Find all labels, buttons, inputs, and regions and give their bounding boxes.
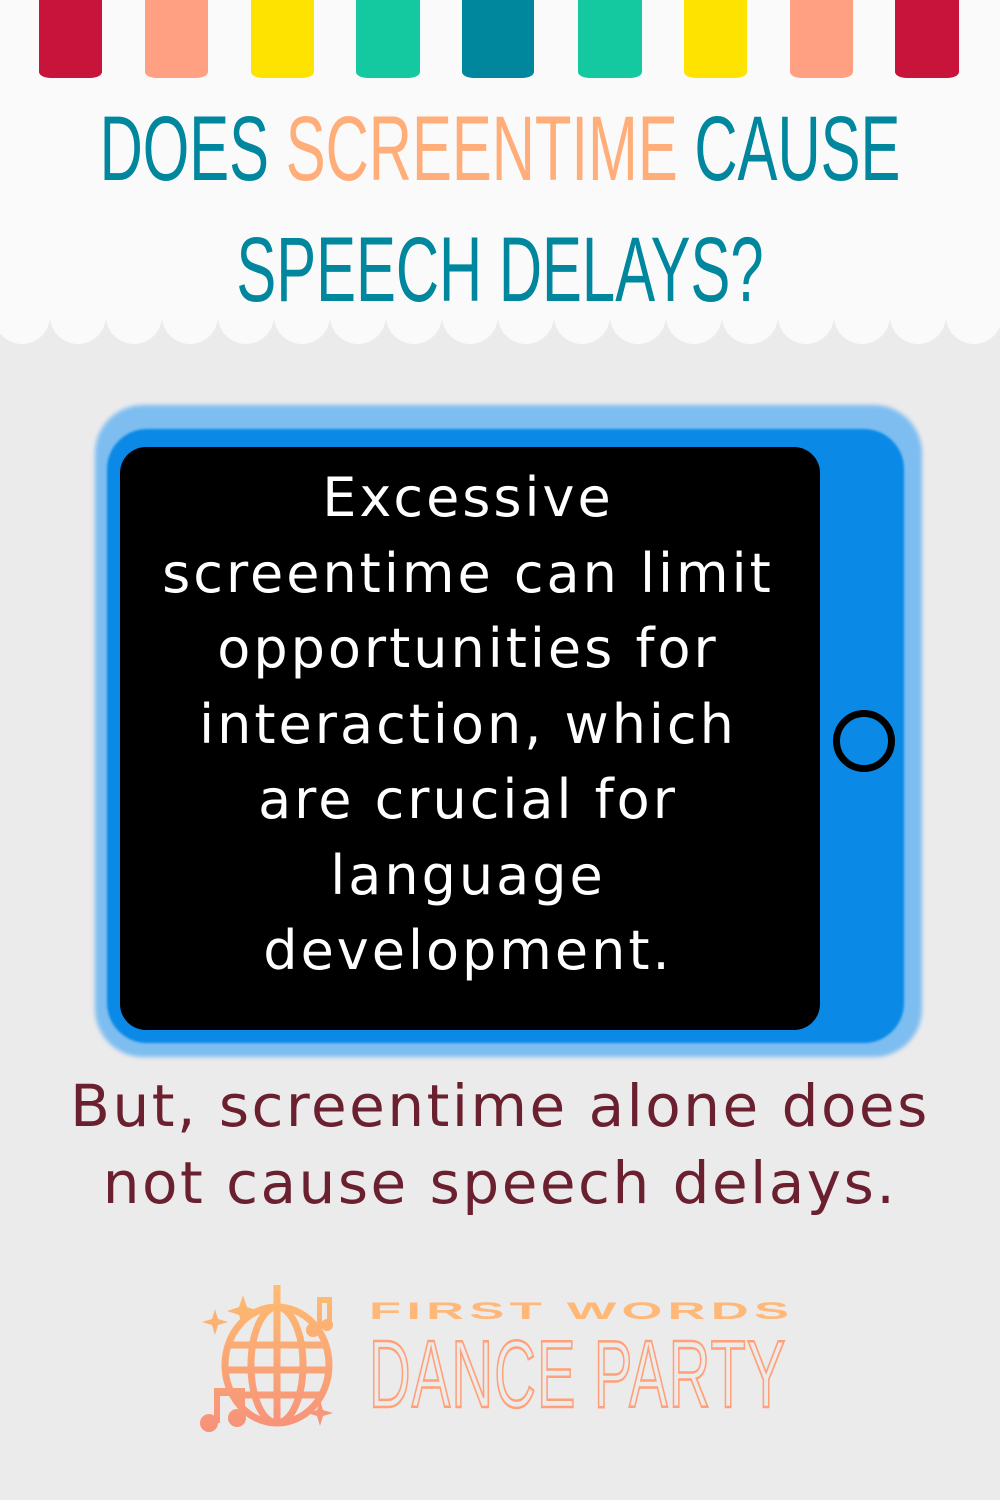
title: DOES SCREENTIME CAUSE: [100, 98, 900, 200]
tablet: [92, 402, 925, 1060]
screen text: screentime can limit: [162, 542, 774, 604]
icon: home button: [833, 710, 895, 772]
screen text: opportunities for: [217, 617, 719, 680]
bottom statement: [70, 1072, 930, 1217]
logo: [200, 1285, 794, 1432]
title: SPEECH DELAYS?: [236, 219, 764, 321]
screen text: [120, 447, 820, 1030]
screen text: interaction, which: [199, 692, 737, 756]
screen text: Excessive: [322, 466, 614, 529]
icon: disco globe: [200, 1285, 333, 1432]
stripes awning: [39, 0, 959, 78]
title: [100, 98, 900, 321]
screen text: development.: [263, 919, 673, 982]
logo text: FIRST WORDS: [369, 1298, 794, 1325]
screen text: language: [330, 844, 606, 906]
bottom statement: But, screentime alone does: [70, 1072, 930, 1140]
bottom statement: not cause speech delays.: [103, 1149, 897, 1217]
screen text: are crucial for: [258, 768, 678, 831]
header background with scallops: [0, 0, 1000, 344]
